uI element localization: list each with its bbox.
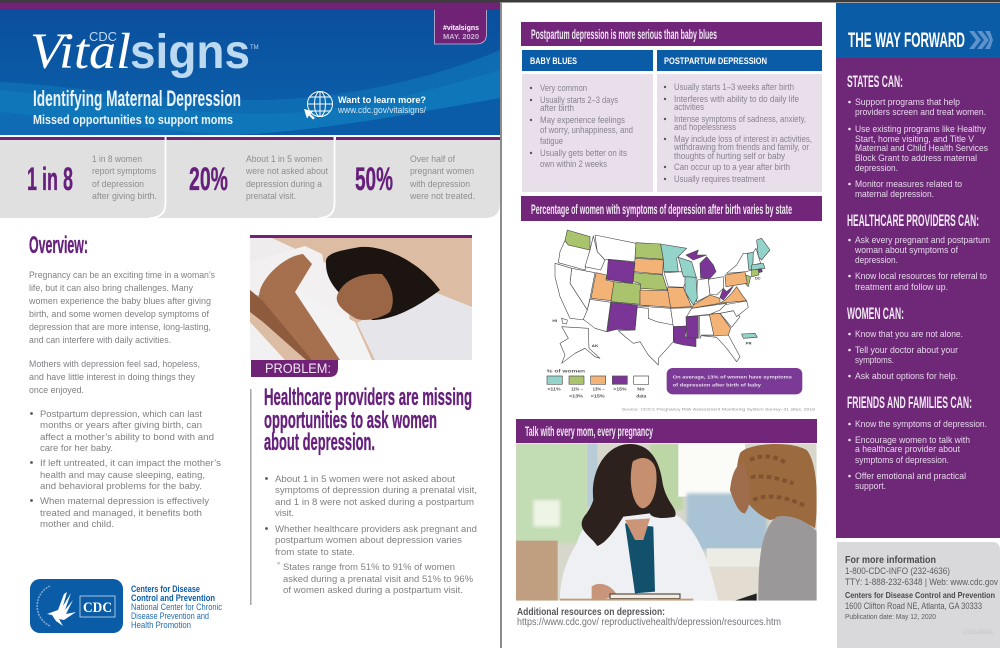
panel: key statistics xyxy=(0,137,500,218)
CDC organization text: Centers for Disease xyxy=(131,584,200,594)
stat card: 50%: pregnant women xyxy=(410,165,474,176)
text block: problem bullets: symptoms of depression during a prenatal visit, xyxy=(275,485,477,496)
heading bar: state variation xyxy=(521,196,822,221)
chart: US choropleth map: AK xyxy=(592,344,599,348)
text block: problem bullets: visit. xyxy=(275,508,294,519)
section: women can: Know that you are not alone. xyxy=(855,329,963,340)
stat card: 1 in 8: report symptoms xyxy=(92,165,156,176)
text block: problem bullets: asked during a prenatal visit and 51% to 96% xyxy=(283,574,473,585)
panel: contact information xyxy=(837,542,1000,648)
section: states can: Start, home visiting, and Title V xyxy=(855,134,975,145)
text block: overview bullets: mother and child. xyxy=(40,519,114,530)
panel: baby blues: BABY BLUES xyxy=(530,56,577,66)
legend: 11% – xyxy=(571,387,584,392)
section: women can: WOMEN CAN: xyxy=(847,304,904,323)
icon: eagle emblem xyxy=(37,586,76,626)
callout: national average: On average, 13% of women have symptoms xyxy=(673,375,792,381)
logo: CDC Vital signs xyxy=(30,24,259,80)
heading bar: postpartum vs baby blues: Postpartum depression is more serious than baby blues xyxy=(531,26,717,42)
logo: CDC Vital signs: TM xyxy=(250,45,259,51)
panel: contact information: For more information xyxy=(845,555,936,566)
CDC organization text: National Center for Chronic xyxy=(131,602,223,612)
panel: baby blues: own within 2 weeks xyxy=(540,159,607,169)
logo: CDC Vital signs: CDC xyxy=(89,30,117,44)
chart: US choropleth map: PR xyxy=(746,342,752,346)
panel: postpartum depression: thoughts of hurting self or baby xyxy=(674,151,786,161)
heading: problem statement: Healthcare providers are missing xyxy=(264,384,472,411)
left page top purple band xyxy=(0,2,500,10)
panel: baby blues: after birth xyxy=(540,103,574,113)
text block: overview paragraphs: Pregnancy can be an exciting time in a woman’s xyxy=(29,270,215,281)
CDC logo block: CDC xyxy=(83,600,112,616)
section: states can: Support programs that help xyxy=(855,97,960,108)
text block: problem bullets: and 1 in 8 were not asked during a postpartum xyxy=(275,497,474,508)
text block: overview bullets: care for her baby. xyxy=(40,443,113,454)
stat card: 20%: depression during a xyxy=(246,178,323,189)
stat card: 50%: with depression xyxy=(409,178,470,189)
section: states can: Maternal and Child Health Services xyxy=(855,143,988,154)
heading: problem statement: about depression. xyxy=(264,429,375,456)
heading: overview: Overview: xyxy=(29,232,88,259)
text block: overview paragraphs: life, but it can also bring challenges. Many xyxy=(29,283,193,294)
stat card: 20%: About 1 in 5 women xyxy=(246,153,322,164)
text block: overview bullets: affect a mother’s ability to bond with and xyxy=(40,432,214,443)
legend: <15% xyxy=(591,393,605,398)
heading: problem statement: opportunities to ask women xyxy=(264,407,437,434)
text block: overview bullets: health and may cause sleeping, eating, xyxy=(40,470,205,481)
section: healthcare providers can: woman about symptoms of xyxy=(854,245,958,256)
section: women can xyxy=(847,304,963,382)
chart: US choropleth map: HI xyxy=(552,319,557,323)
section: states can: depression. xyxy=(855,163,898,174)
legend: >15% xyxy=(613,387,627,392)
text block: overview bullets: and behavioral problems for the baby. xyxy=(40,481,202,492)
panel: baby blues: Very common xyxy=(540,83,587,93)
stat card: 50%: were not treated. xyxy=(409,190,475,201)
panel: postpartum depression: Intense symptoms of sadness, anxiety, xyxy=(674,114,806,124)
panel: postpartum depression: withdrawing from friends and family, or xyxy=(673,142,809,152)
panel: baby blues: of worry, unhappiness, and xyxy=(540,125,633,135)
date tag xyxy=(434,10,486,44)
CDC logo block xyxy=(30,579,123,633)
text block: additional resources: Additional resources on depression: xyxy=(517,607,665,618)
panel: postpartum depression: POSTPARTUM DEPRESSION xyxy=(664,56,767,66)
text block: problem bullets: States range from 51% to 91% of women xyxy=(283,562,455,573)
section: healthcare providers can xyxy=(847,211,990,293)
heading: problem statement xyxy=(264,384,472,456)
panel: postpartum depression xyxy=(657,50,822,192)
text block: overview paragraphs: women experience the baby blues after giving xyxy=(28,296,211,307)
logo: CDC Vital signs: Vital xyxy=(30,24,131,80)
logo: CDC Vital signs: signs xyxy=(130,26,250,79)
text block: problem bullets: About 1 in 5 women were not asked about xyxy=(275,474,455,485)
stat card: 1 in 8: 1 in 8 women xyxy=(92,153,142,164)
heading bar: postpartum vs baby blues xyxy=(521,22,822,46)
panel: postpartum depression: and hopelessness xyxy=(674,122,736,132)
panel: baby blues: Usually starts 2–3 days xyxy=(540,95,618,105)
panel: contact information: Publication date: May 12, 2020 xyxy=(845,614,936,621)
text block: problem bullets: of women asked during a postpartum visit. xyxy=(283,585,463,596)
section: friends and families can: Encourage women to talk with xyxy=(855,435,970,446)
panel: baby blues: May experience feelings xyxy=(540,115,625,125)
learn more link xyxy=(337,95,426,115)
text block: overview bullets: If left untreated, it can impact the mother’s xyxy=(40,458,221,469)
section: healthcare providers can: depression. xyxy=(855,255,898,266)
panel: postpartum depression: activities xyxy=(674,102,704,112)
icon: chevron arrows xyxy=(969,31,993,49)
panel: postpartum depression: May include loss of interest in activities, xyxy=(674,134,812,144)
text block: overview paragraphs: once enjoyed. xyxy=(29,385,84,396)
stat card: 50% xyxy=(355,153,475,201)
report subtitle: Missed opportunities to support moms xyxy=(33,112,233,127)
section: states can: STATES CAN: xyxy=(847,72,903,91)
panel: postpartum depression: Interferes with ability to do daily life xyxy=(674,94,799,104)
text block: overview bullets: months or years after giving birth, can xyxy=(40,420,202,431)
chart: US choropleth map: DC xyxy=(755,277,761,281)
legend: <13% xyxy=(569,393,583,398)
text block: problem bullets: postpartum women about depression varies xyxy=(275,535,462,546)
panel: contact information: CS314884A xyxy=(963,630,993,636)
CDC organization text: Health Promotion xyxy=(131,620,191,630)
panel: contact information: 1-800-CDC-INFO (232-4636) xyxy=(845,565,950,576)
stat card: 1 in 8: 1 in 8 xyxy=(27,161,73,197)
section: friends and families can xyxy=(847,393,987,492)
section: friends and families can: Offer emotional and practical xyxy=(855,471,966,482)
legend xyxy=(547,369,649,398)
text block: problem bullets: Whether healthcare providers ask pregnant and xyxy=(275,524,477,535)
icon: globe with cursor xyxy=(304,92,332,120)
text block: overview paragraphs xyxy=(28,270,215,396)
stat card: 20%: prenatal visit. xyxy=(246,190,296,201)
photo: woman lying on pillow xyxy=(250,235,472,360)
section: women can: Ask about options for help. xyxy=(855,371,958,382)
section: states can: Block Grant to address maternal xyxy=(855,153,977,164)
section: states can xyxy=(847,72,988,200)
section: friends and families can: symptoms of depression. xyxy=(855,455,949,466)
heading bar: talk with every mom: Talk with every mom, every pregnancy xyxy=(525,423,653,439)
panel: baby blues: Usually gets better on its xyxy=(540,148,627,158)
heading bar: talk with every mom xyxy=(516,419,817,443)
text block: problem bullets: ° xyxy=(277,561,280,570)
CDC organization text xyxy=(131,584,223,630)
learn more link: www.cdc.gov/vitalsigns/ xyxy=(337,105,426,115)
section: healthcare providers can: Know local resources for referral to xyxy=(855,271,987,282)
stat card: 1 in 8: after giving birth. xyxy=(92,190,157,201)
stat card: 20%: 20% xyxy=(189,161,228,197)
stat card: 1 in 8 xyxy=(27,153,157,201)
stat card: 20%: were not asked about xyxy=(245,165,328,176)
section: healthcare providers can: treatment and follow up. xyxy=(855,282,948,293)
legend: <11% xyxy=(547,387,561,392)
date tag: MAY. 2020 xyxy=(443,32,479,41)
section: states can: Monitor measures related to xyxy=(855,179,962,190)
panel: baby blues xyxy=(522,50,653,192)
text block: overview bullets: When maternal depression is effectively xyxy=(40,496,209,507)
stat card: 20% xyxy=(189,153,328,201)
panel: postpartum depression: Usually starts 1–3 weeks after birth xyxy=(674,82,794,92)
source note: Source: CDC’s Pregnancy Risk Assessment Monitoring System Survey–31 sites, 2018 xyxy=(622,406,816,411)
section: friends and families can: support. xyxy=(855,481,886,492)
text block: problem bullets: from state to state. xyxy=(275,547,355,558)
panel: baby blues: fatigue xyxy=(540,136,563,146)
text block: additional resources: https://www.cdc.gov/ reproductivehealth/depression/resources.htm xyxy=(517,617,781,628)
text block: overview bullets: treated and managed, it benefits both xyxy=(40,508,202,519)
learn more link: Want to learn more? xyxy=(338,95,426,106)
tag: PROBLEM: PROBLEM: xyxy=(265,360,331,376)
panel: postpartum depression: Usually requires treatment xyxy=(674,174,765,184)
text block: overview paragraphs: and can interfere with daily activities. xyxy=(29,335,171,346)
stat card: 50%: Over half of xyxy=(410,153,455,164)
date tag: #vitalsigns xyxy=(443,23,479,32)
text block: problem bullets xyxy=(265,474,477,596)
stat card: 1 in 8: of depression xyxy=(92,178,144,189)
section: women can: symptoms. xyxy=(855,355,894,366)
section: states can: Use existing programs like Healthy xyxy=(855,124,986,135)
text block: overview bullets xyxy=(30,409,221,530)
legend: 13% – xyxy=(593,387,605,392)
legend: % of women xyxy=(547,369,585,375)
heading: the way forward xyxy=(836,3,1000,58)
text block: additional resources xyxy=(517,607,781,628)
photo: doctor talking with patient xyxy=(516,443,818,601)
report title: Identifying Maternal Depression xyxy=(33,86,241,111)
chart: US choropleth map xyxy=(547,230,816,411)
legend: data xyxy=(636,393,647,398)
stat card: 50%: 50% xyxy=(355,161,393,197)
text block: overview bullets: Postpartum depression, which can last xyxy=(40,409,202,420)
panel: postpartum depression: Can occur up to a year after birth xyxy=(674,162,790,172)
CDC organization text: Disease Prevention and xyxy=(131,611,209,621)
section: women can: Tell your doctor about your xyxy=(855,345,958,356)
section: friends and families can: a healthcare provider about xyxy=(855,444,960,455)
callout: national average xyxy=(667,368,802,394)
section: friends and families can: Know the symptoms of depression. xyxy=(855,419,987,430)
text block: overview paragraphs: depression that are more intense, long-lasting, xyxy=(29,322,211,333)
panel: the way forward xyxy=(836,3,1000,538)
text block: overview paragraphs: birth, and some women develop symptoms of xyxy=(29,309,209,320)
text block: overview paragraphs: and have little interest in doing things they xyxy=(29,372,195,383)
CDC organization text: Control and Prevention xyxy=(131,593,215,603)
header banner xyxy=(0,10,500,135)
legend: No xyxy=(637,387,645,392)
callout: national average: of depression after birth of baby xyxy=(673,382,761,388)
section: states can: providers screen and treat women. xyxy=(855,107,986,118)
section: states can: maternal depression. xyxy=(855,189,934,200)
text block: overview paragraphs: Mothers with depression feel sad, hopeless, xyxy=(29,359,200,370)
